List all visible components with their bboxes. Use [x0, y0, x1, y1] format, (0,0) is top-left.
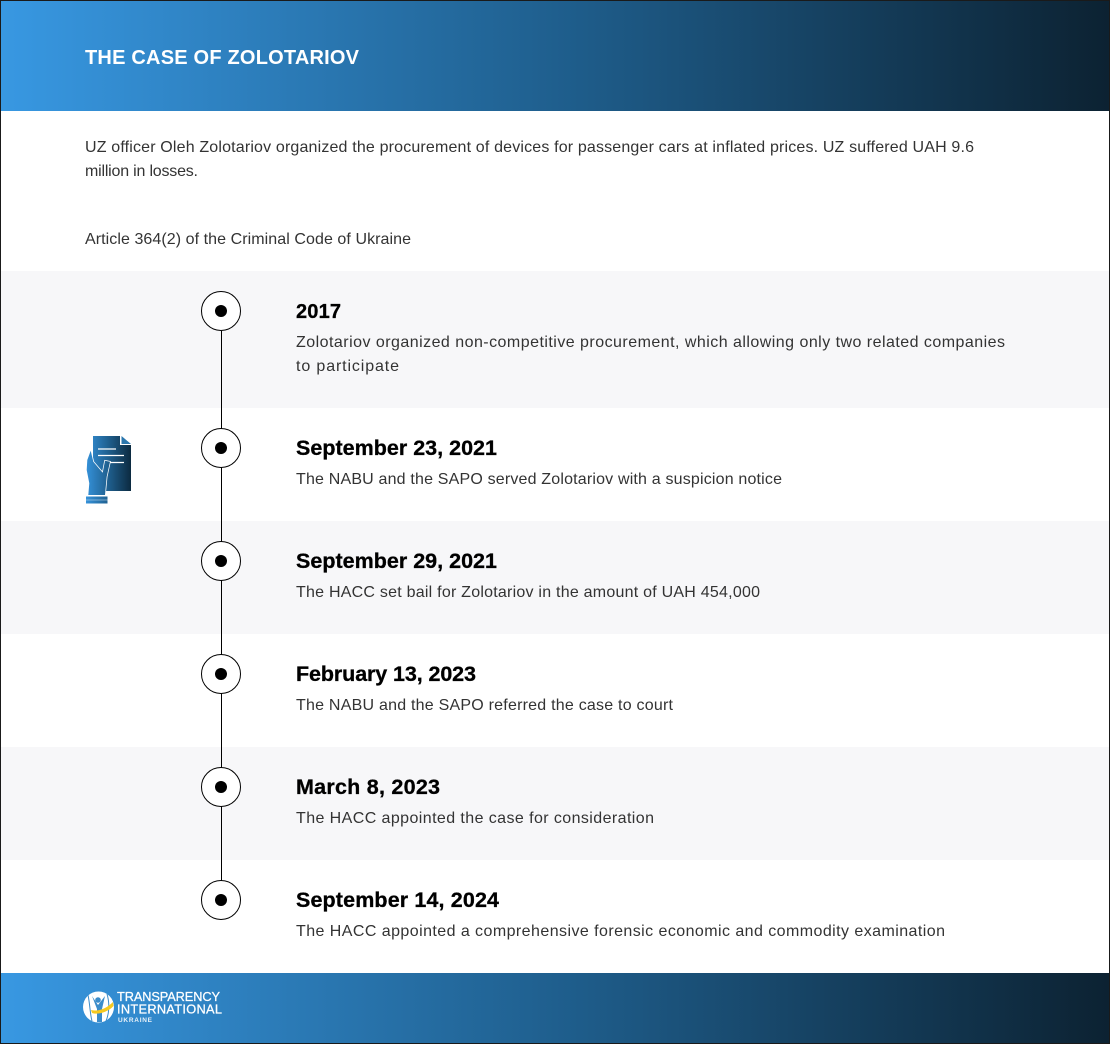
panel: footer banner — [1, 973, 1109, 1043]
logo: Transparency International Ukraine: TRANSPARENCY — [117, 989, 220, 1004]
timeline event: September 14, 2024: The HACC appointed a comprehensive forensic economic and commodity examination — [296, 923, 945, 940]
timeline event: 2017: Zolotariov organized non-competitive procurement, which allowing only two related companies — [296, 334, 1005, 351]
timeline event: September 14, 2024: September 14, 2024 — [296, 888, 499, 912]
text block: case summary — [85, 139, 974, 180]
timeline event: September 29, 2021: September 29, 2021 — [296, 549, 497, 573]
timeline event: 2017: 2017 — [296, 301, 341, 323]
timeline event: March 8, 2023 — [202, 768, 654, 827]
timeline event: September 29, 2021: The HACC set bail for Zolotariov in the amount of UAH 454,000 — [296, 584, 760, 601]
timeline event: March 8, 2023: March 8, 2023 — [296, 775, 440, 799]
timeline event: September 14, 2024 — [202, 880, 945, 940]
timeline event: September 29, 2021 — [202, 542, 760, 601]
icon: hand holding document — [86, 436, 131, 504]
timeline axis line — [220, 331, 222, 881]
timeline event: September 23, 2021: September 23, 2021 — [296, 436, 497, 460]
timeline event: September 23, 2021 — [202, 428, 782, 488]
logo: Transparency International Ukraine: UKRAINE — [118, 1017, 153, 1024]
timeline event: 2017: to participate — [296, 358, 399, 375]
text block: case summary: million in losses. — [85, 163, 198, 180]
logo: Transparency International Ukraine: INTERNATIONAL — [117, 1002, 222, 1016]
timeline event: February 13, 2023 — [202, 654, 674, 714]
timeline event: February 13, 2023: The NABU and the SAPO referred the case to court — [296, 697, 674, 714]
panel: header banner — [1, 1, 1109, 111]
panel: timeline row backgrounds — [1, 271, 1109, 860]
text block: case summary: UZ officer Oleh Zolotariov organized the procurement of devices for passenger cars at inflated prices. UZ suffered UAH 9.6 — [85, 139, 974, 156]
title: THE CASE OF ZOLOTARIOV — [85, 47, 360, 69]
timeline event: February 13, 2023: February 13, 2023 — [296, 662, 476, 686]
timeline event: March 8, 2023: The HACC appointed the case for consideration — [296, 810, 654, 827]
logo: Transparency International Ukraine — [83, 989, 222, 1024]
text block: legal article: Article 364(2) of the Criminal Code of Ukraine — [85, 231, 411, 248]
timeline event: September 23, 2021: The NABU and the SAPO served Zolotariov with a suspicion notice — [296, 471, 782, 488]
timeline event: 2017 — [202, 292, 1005, 375]
